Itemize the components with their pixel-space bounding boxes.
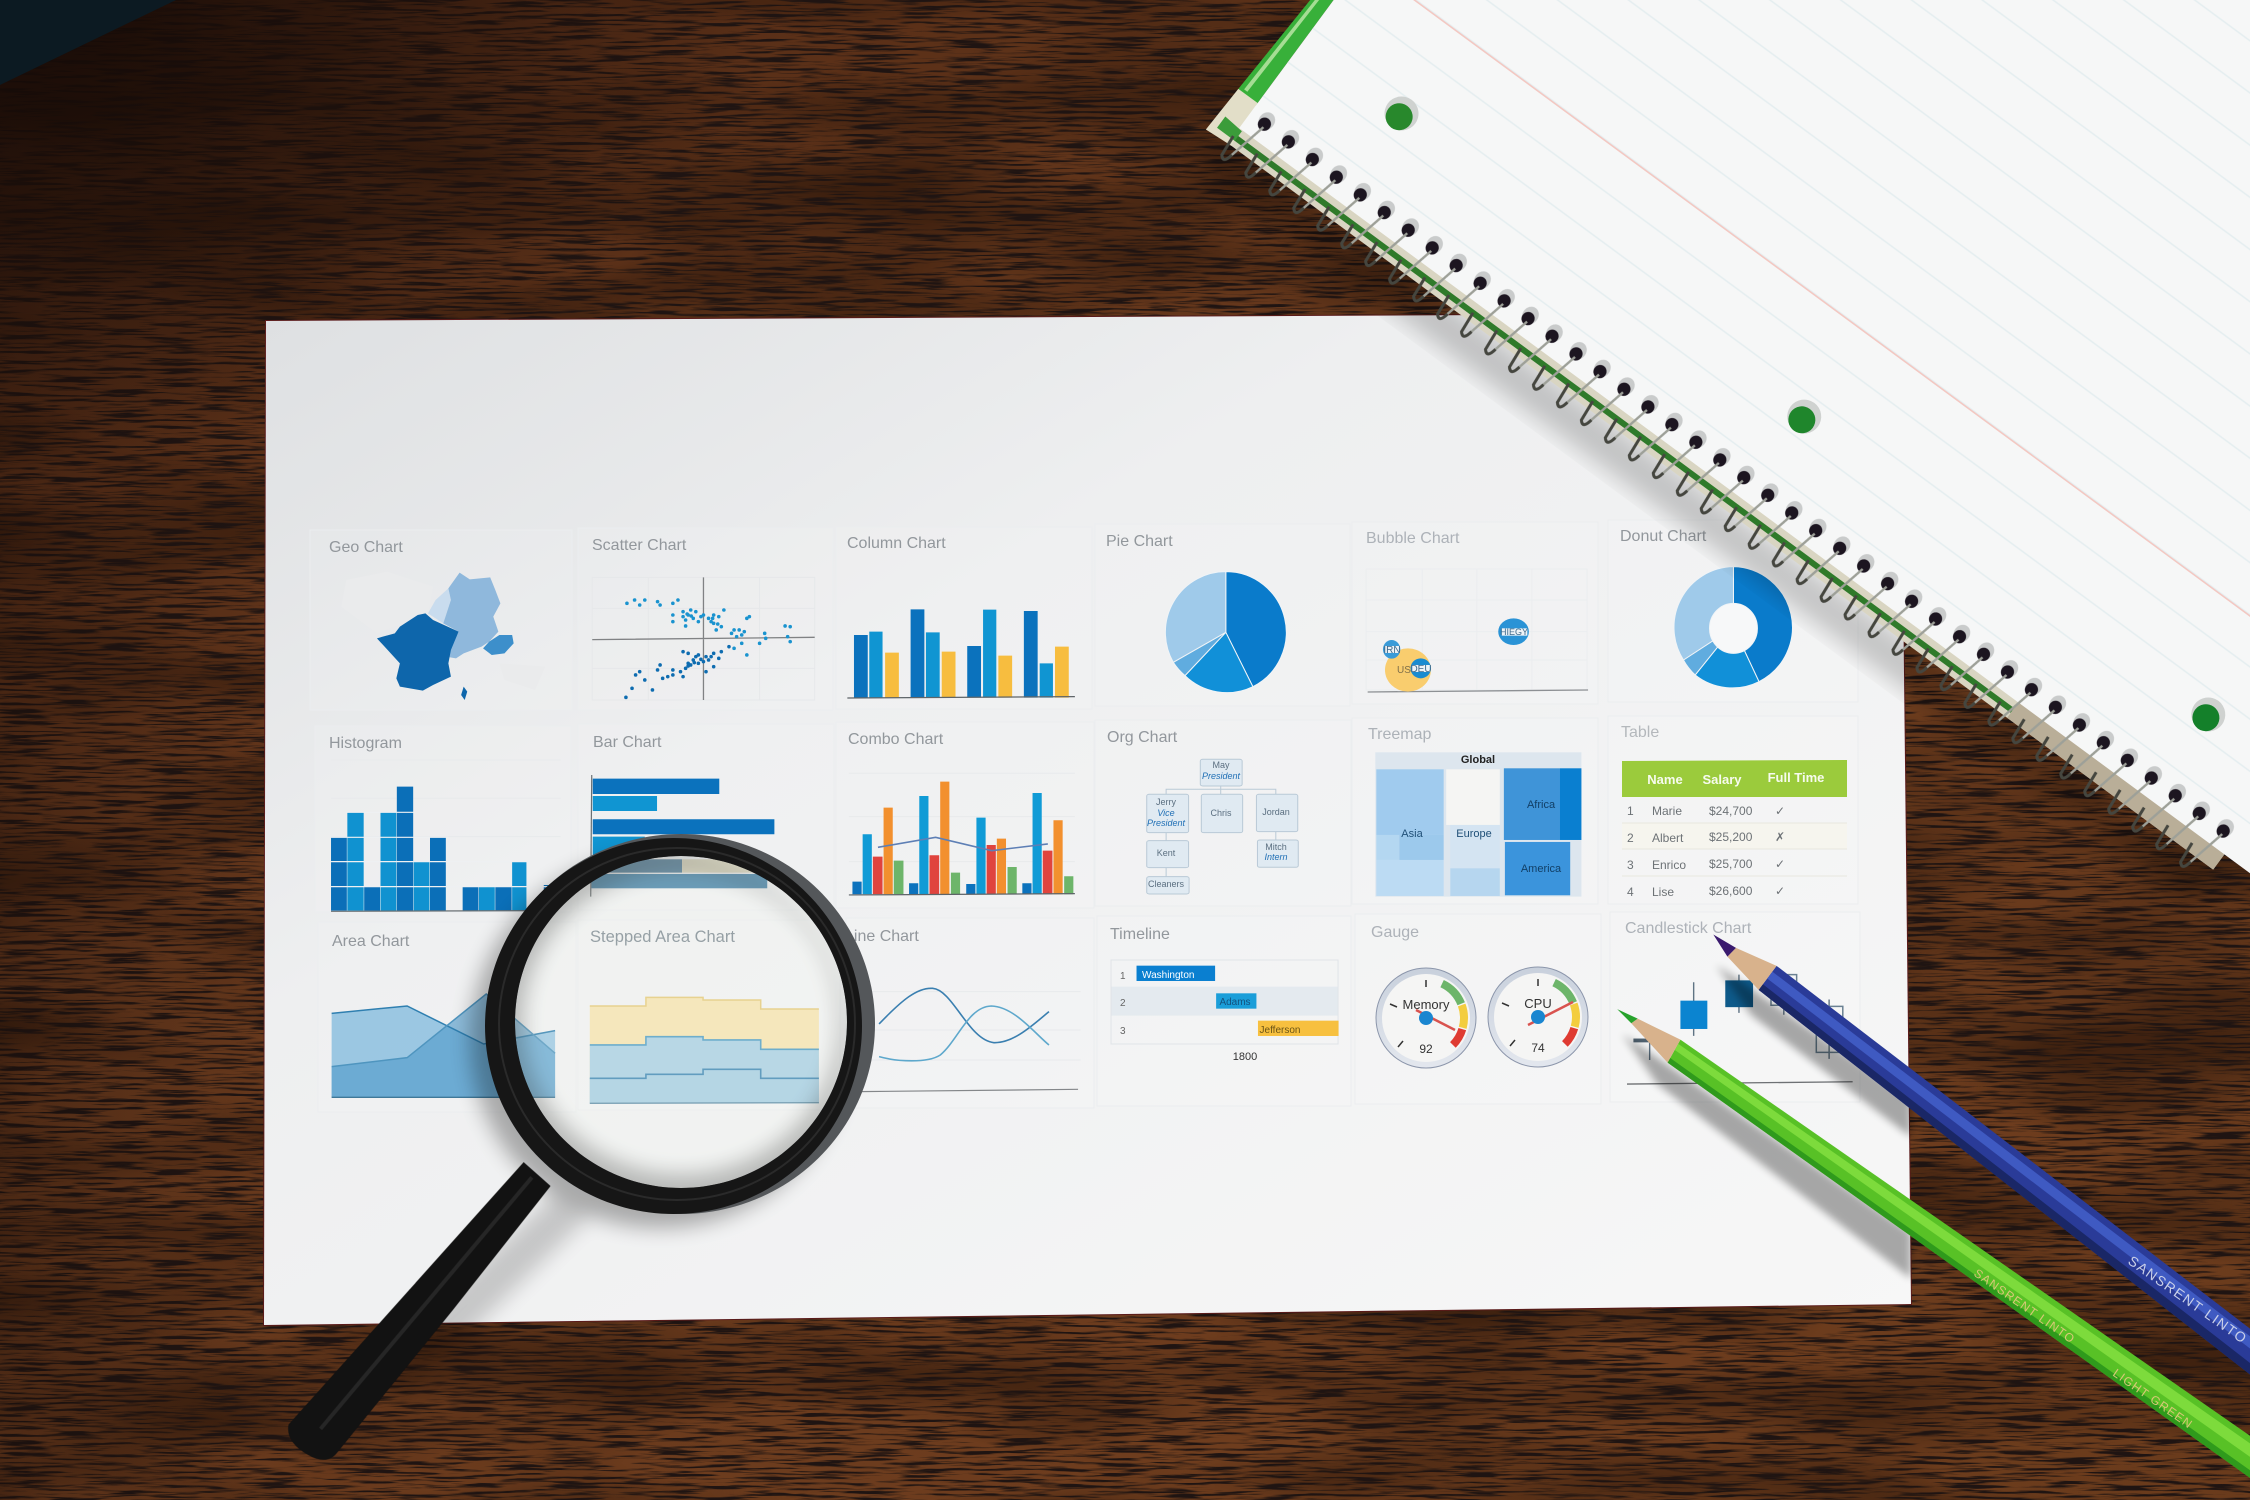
gauge: memory	[1376, 968, 1476, 1068]
table rows: Lise	[1652, 885, 1674, 899]
org labels: May	[1212, 760, 1230, 770]
gauge: cpu	[1488, 967, 1588, 1067]
gauge: cpu: CPU	[1524, 996, 1552, 1011]
bubble labels: HIEGY	[1500, 627, 1528, 637]
org labels: Jerry	[1156, 797, 1176, 807]
panel: scatter chart: Scatter Chart	[592, 537, 687, 554]
green pencil imprint	[1971, 1266, 2196, 1432]
table rows	[1622, 804, 1847, 899]
table rows: ✓	[1775, 857, 1785, 871]
panel: table	[1608, 716, 1858, 904]
table header: Salary	[1702, 772, 1742, 787]
table rows: 3	[1627, 858, 1634, 872]
green pencil imprint: LIGHT GREEN	[2110, 1366, 2196, 1432]
panel: org chart: Org Chart	[1107, 729, 1178, 746]
org labels	[1147, 760, 1290, 889]
timeline labels: Washington	[1142, 970, 1194, 981]
panel: line chart: Line Chart	[845, 928, 919, 945]
table rows: $25,200	[1709, 830, 1753, 844]
org labels: Mitch	[1265, 842, 1287, 852]
timeline labels: Jefferson	[1260, 1025, 1300, 1036]
spiral notebook	[1179, 0, 2250, 1190]
panel: stepped area chart: Stepped Area Chart	[590, 928, 735, 946]
table header	[1622, 760, 1847, 797]
table rows: $24,700	[1709, 804, 1753, 818]
table header: Full Time	[1768, 770, 1824, 785]
table rows: Enrico	[1652, 858, 1686, 872]
timeline labels: 2	[1120, 998, 1126, 1009]
horizontal bars	[591, 775, 774, 897]
worn cover corner	[1206, 88, 1261, 147]
panel: histogram	[315, 726, 571, 912]
timeline labels	[1120, 970, 1300, 1063]
bubble labels: DEU	[1410, 664, 1432, 675]
panel: area chart	[318, 922, 576, 1112]
ring	[487, 834, 875, 1214]
panel: stepped area chart	[578, 920, 840, 1110]
area series	[332, 994, 555, 1097]
bubble labels: IRN	[1383, 645, 1401, 656]
treemap blocks	[1375, 752, 1581, 897]
gauge: cpu: 74	[1531, 1041, 1545, 1055]
org labels: President	[1202, 771, 1241, 781]
panel: treemap	[1352, 718, 1598, 904]
table header: Name	[1647, 772, 1683, 787]
ruled lines	[1262, 0, 2250, 1105]
handle	[288, 1162, 551, 1460]
panel: treemap: Treemap	[1368, 726, 1432, 743]
org labels: Jordan	[1262, 807, 1290, 817]
panel: org chart	[1095, 720, 1351, 906]
panel: area chart: Area Chart	[332, 933, 410, 950]
page holes	[1374, 90, 2235, 739]
pencil shadows	[1623, 965, 1911, 1279]
panel: geo chart	[310, 530, 572, 710]
margin line	[1362, 0, 2250, 970]
bubble labels: US	[1397, 665, 1411, 676]
blue pencil imprint: SANSRENT LINTO	[2125, 1252, 2250, 1347]
printed chart sheet	[264, 313, 1911, 1325]
table rows: $25,700	[1709, 857, 1753, 871]
org labels: Kent	[1157, 848, 1176, 858]
panel: pie chart	[1095, 524, 1350, 706]
green spine line	[1222, 127, 2014, 713]
panel: line chart	[845, 918, 1094, 1108]
panel: column chart: Column Chart	[847, 535, 946, 552]
treemap labels	[1401, 754, 1562, 875]
panel: scatter chart	[578, 528, 833, 710]
treemap labels: Global	[1461, 754, 1495, 766]
table rows: 2	[1627, 831, 1634, 845]
panel: timeline	[1097, 916, 1351, 1106]
org boxes and connectors	[1147, 759, 1298, 894]
combo bars and line	[849, 773, 1075, 895]
magnifying glass	[288, 834, 875, 1460]
candlesticks	[1627, 975, 1853, 1084]
panel: candlestick chart: Candlestick Chart	[1625, 920, 1752, 937]
spiral binding	[1198, 99, 2241, 905]
magnifier shadow	[365, 852, 850, 1400]
pie	[1165, 572, 1286, 693]
back strip	[1217, 119, 2225, 870]
panel: timeline: Timeline	[1110, 926, 1170, 943]
pencils	[1617, 934, 2250, 1478]
green pencil	[1617, 1009, 2250, 1478]
panel: combo chart	[836, 722, 1094, 908]
panel: combo chart: Combo Chart	[848, 731, 944, 748]
bubble plot	[1366, 569, 1588, 692]
treemap labels: Africa	[1527, 799, 1556, 811]
green cover	[1237, 0, 1363, 105]
timeline labels: 1800	[1233, 1051, 1257, 1063]
org labels: President	[1147, 818, 1186, 828]
stepped areas	[590, 997, 819, 1103]
table rows: $26,600	[1709, 884, 1753, 898]
timeline labels: 1	[1120, 971, 1126, 982]
donut	[1674, 567, 1792, 688]
timeline labels: Adams	[1219, 997, 1251, 1008]
lens tint	[515, 856, 847, 1188]
org labels: Intern	[1264, 852, 1288, 862]
panel: bubble chart: Bubble Chart	[1366, 530, 1460, 547]
org labels: Chris	[1210, 808, 1232, 818]
panel: column chart	[836, 527, 1092, 709]
panel: donut chart	[1608, 520, 1858, 702]
panel: gauge	[1355, 914, 1601, 1104]
green pencil imprint: SANSRENT LINTO	[1971, 1266, 2078, 1347]
table rows: Marie	[1652, 804, 1682, 818]
geo map	[341, 572, 545, 700]
panel: geo chart: Geo Chart	[329, 539, 403, 556]
table rows: 4	[1627, 885, 1634, 899]
column bars	[847, 609, 1075, 698]
org labels: Vice	[1157, 808, 1175, 818]
panel: candlestick chart	[1610, 912, 1860, 1102]
panel: bar chart: Bar Chart	[593, 734, 662, 751]
panel: histogram: Histogram	[329, 735, 402, 752]
notebook shadow	[1196, 135, 2218, 903]
line series	[859, 988, 1081, 1092]
treemap labels: Europe	[1456, 828, 1492, 840]
histogram bars	[331, 760, 561, 911]
scatter plot	[592, 577, 815, 700]
panel: gauge: Gauge	[1371, 924, 1419, 941]
timeline labels: 3	[1120, 1026, 1126, 1037]
table rows: ✗	[1775, 830, 1785, 844]
timeline bars	[1111, 960, 1339, 1044]
treemap labels: America	[1521, 863, 1562, 875]
table rows: ✓	[1775, 884, 1785, 898]
panel: donut chart: Donut Chart	[1620, 528, 1707, 545]
blue pencil	[1713, 934, 2250, 1375]
treemap labels: Asia	[1401, 828, 1424, 840]
gauge: memory: 92	[1419, 1042, 1433, 1056]
table rows: Albert	[1652, 831, 1684, 845]
gauge: memory: Memory	[1403, 997, 1450, 1012]
panel: bubble chart	[1352, 522, 1598, 704]
worn strip end	[2007, 702, 2225, 870]
table rows: 1	[1627, 804, 1634, 818]
panel: bar chart	[578, 724, 834, 910]
panel: table: Table	[1621, 724, 1659, 741]
table rows: ✓	[1775, 804, 1785, 818]
page	[1239, 0, 2250, 1137]
bubble labels	[1383, 627, 1528, 676]
org labels: Cleaners	[1148, 879, 1185, 889]
panel: pie chart: Pie Chart	[1106, 533, 1173, 550]
